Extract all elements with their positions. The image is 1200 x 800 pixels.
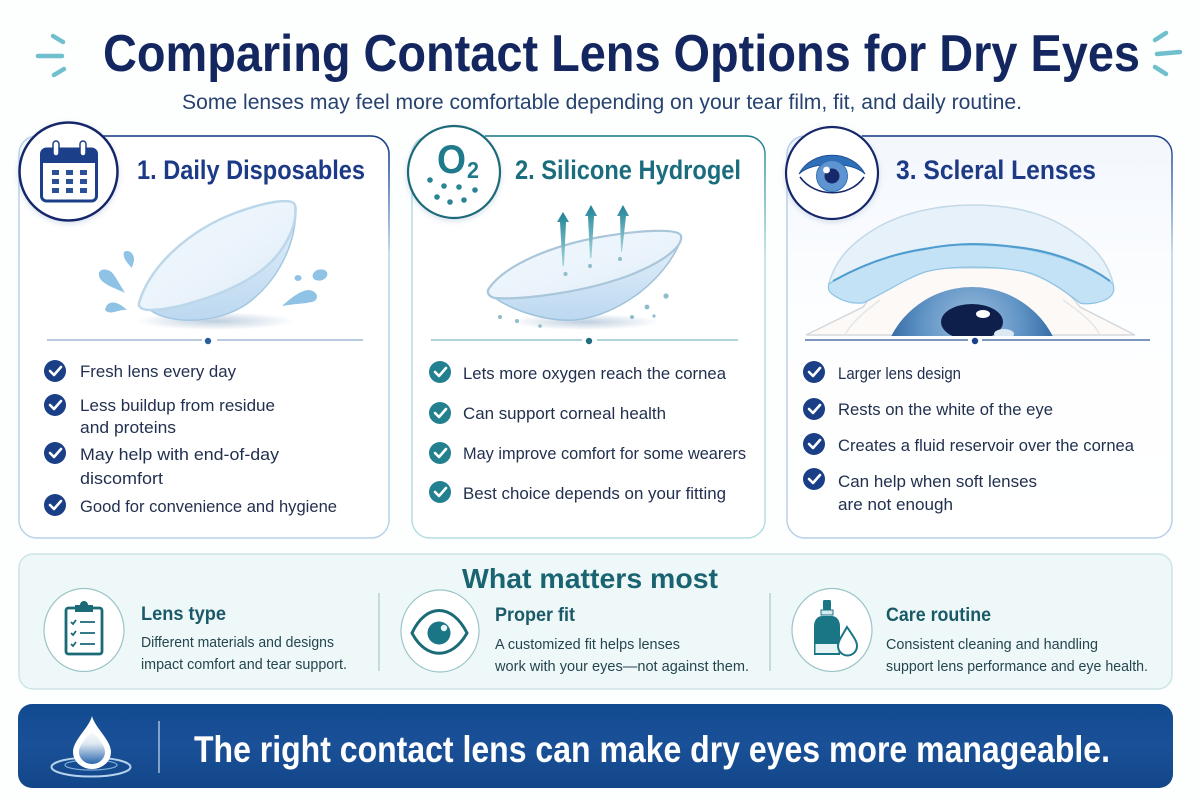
list: silicone hydrogel: Can support corneal health [463,405,666,423]
list: silicone hydrogel [429,361,746,503]
list: scleral lenses: are not enough [838,496,953,514]
list: daily disposables: Less buildup from residue [80,397,275,415]
icon: eye [401,590,479,672]
divider [805,338,1150,344]
illustration: contact lens with splashes [99,201,329,330]
item: lens type [44,588,347,673]
heading: 2. Silicone Hydrogel [515,155,741,185]
item: proper fit: A customized fit helps lenses [495,637,680,653]
list: silicone hydrogel: Lets more oxygen reach the cornea [463,365,727,383]
icon: left sparkle [38,36,64,75]
list: scleral lenses: Rests on the white of the eye [838,401,1053,419]
list: scleral lenses: Creates a fluid reservoir over the cornea [838,437,1135,455]
divider [47,338,363,344]
divider [431,338,738,344]
item: proper fit: work with your eyes—not against them. [494,659,749,675]
list: silicone hydrogel: Best choice depends on your fitting [463,485,726,503]
item: care routine [792,588,1148,675]
panel: what matters most [19,554,1172,689]
heading: 3. Scleral Lenses [896,155,1096,185]
item: care routine: Care routine [886,605,991,626]
icon: clipboard [44,588,124,672]
item: lens type: Lens type [141,604,226,625]
list: daily disposables: Fresh lens every day [80,363,237,381]
heading: 1. Daily Disposables [137,155,365,185]
icon: calendar [20,122,118,220]
panel: silicone hydrogel [408,126,765,538]
subtitle: Some lenses may feel more comfortable depending on your tear film, fit, and daily routine. [182,91,1022,114]
list: scleral lenses [803,361,1135,514]
banner [18,704,1173,788]
list: daily disposables: and proteins [80,419,176,437]
item: proper fit [401,590,749,675]
illustration: scleral lens over eye [806,204,1136,336]
item: care routine: support lens performance and eye health. [886,659,1148,675]
list: silicone hydrogel: May improve comfort for some wearers [463,445,746,463]
list: daily disposables: May help with end-of-day [80,446,280,464]
icon: oxygen: 2 [467,157,479,183]
list: daily disposables [44,360,337,516]
icon: eye [786,127,878,219]
item: care routine: Consistent cleaning and handling [886,637,1098,653]
icon: right sparkle [1155,33,1180,74]
list: daily disposables: discomfort [80,470,163,488]
icon: oxygen: O [437,138,466,182]
heading: What matters most [462,563,718,594]
list: scleral lenses: Larger lens design [838,365,961,383]
item: lens type: Different materials and designs [141,635,334,651]
list: scleral lenses: Can help when soft lenses [838,473,1037,491]
panel: daily disposables [19,122,389,538]
arrows up [557,205,629,266]
item: lens type: impact comfort and tear support. [141,657,347,673]
panel: scleral lenses [786,127,1172,538]
list: daily disposables: Good for convenience and hygiene [80,498,337,516]
icon: water drop [52,716,130,776]
icon: oxygen [408,126,500,218]
illustration: lens with oxygen arrows [488,205,681,330]
icon: solution bottle and drop [792,588,872,672]
item: proper fit: Proper fit [495,605,576,626]
